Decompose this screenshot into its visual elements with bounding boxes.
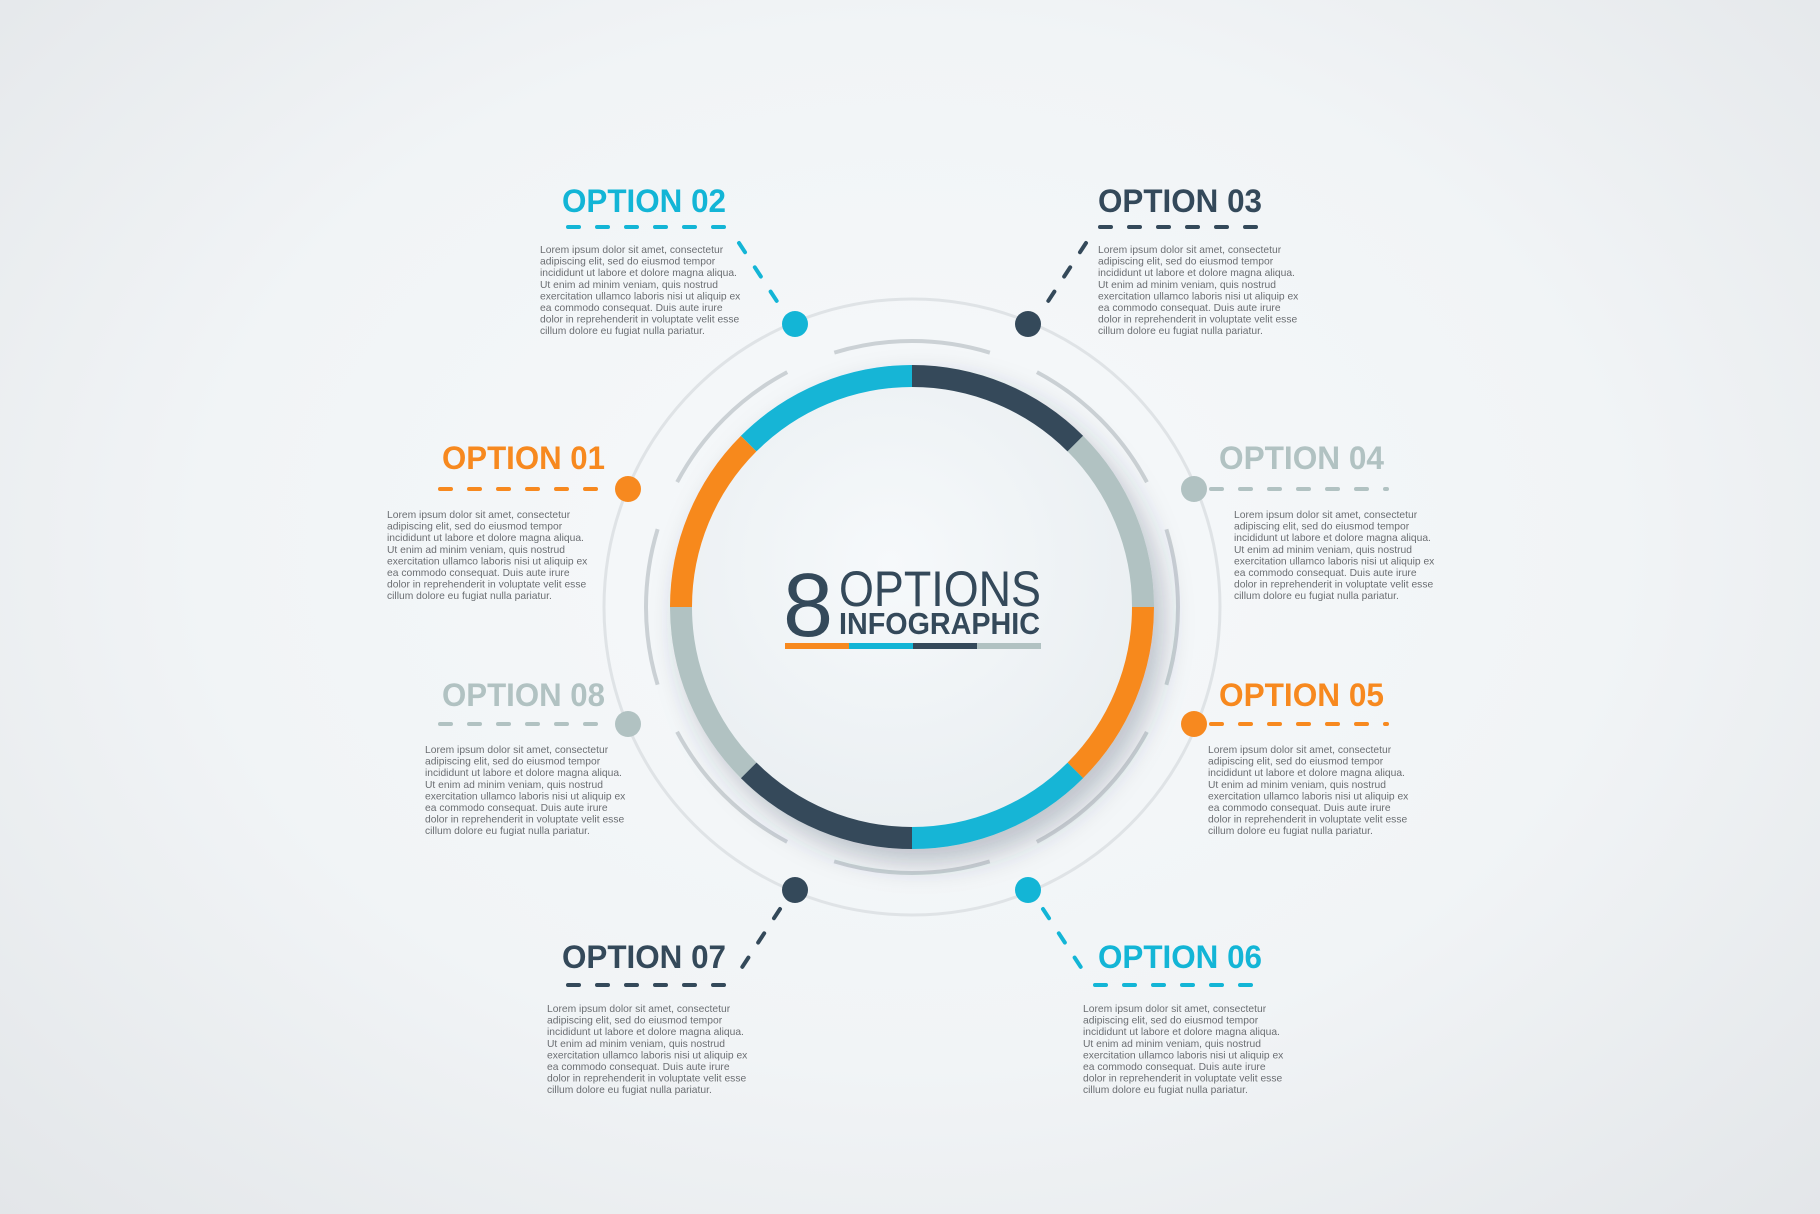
- option 08: adipiscing elit, sed do eiusmod tempor: [425, 757, 601, 768]
- option 06: dolor in reprehenderit in voluptate velit esse: [1083, 1074, 1282, 1085]
- option 08: cillum dolore eu fugiat nulla pariatur.: [425, 826, 590, 837]
- option 06: adipiscing elit, sed do eiusmod tempor: [1083, 1016, 1259, 1027]
- option 05: adipiscing elit, sed do eiusmod tempor: [1208, 757, 1384, 768]
- option 05: Ut enim ad minim veniam, quis nostrud: [1208, 780, 1386, 791]
- option 04: OPTION 04: [1219, 440, 1384, 476]
- option 08: OPTION 08: [442, 677, 605, 713]
- option 05: ea commodo consequat. Duis aute irure: [1208, 803, 1391, 814]
- option 02: Ut enim ad minim veniam, quis nostrud: [540, 280, 718, 291]
- option 07: [547, 877, 808, 1096]
- center title: INFOGRAPHIC: [839, 606, 1040, 641]
- option 01: exercitation ullamco laboris nisi ut aliquip ex: [387, 556, 588, 567]
- option 03: exercitation ullamco laboris nisi ut aliquip ex: [1098, 291, 1299, 302]
- option 07: ea commodo consequat. Duis aute irure: [547, 1062, 730, 1073]
- option 03: incididunt ut labore et dolore magna aliqua.: [1098, 268, 1295, 279]
- outer thin circle: [604, 299, 1220, 915]
- option 04: [1181, 440, 1435, 602]
- option 02: OPTION 02: [562, 183, 726, 219]
- option 08: ea commodo consequat. Duis aute irure: [425, 803, 608, 814]
- option 03: [1015, 183, 1299, 337]
- option 08: exercitation ullamco laboris nisi ut aliquip ex: [425, 791, 626, 802]
- option 02: ea commodo consequat. Duis aute irure: [540, 303, 723, 314]
- option 02: exercitation ullamco laboris nisi ut aliquip ex: [540, 291, 741, 302]
- option 07: cillum dolore eu fugiat nulla pariatur.: [547, 1085, 712, 1096]
- option 01: Lorem ipsum dolor sit amet, consectetur: [387, 510, 571, 521]
- option 07: OPTION 07: [562, 939, 726, 975]
- option 01: incididunt ut labore et dolore magna aliqua.: [387, 533, 584, 544]
- option 01: OPTION 01: [442, 440, 605, 476]
- central ring with disc: [585, 280, 1239, 934]
- option 02: incididunt ut labore et dolore magna aliqua.: [540, 268, 737, 279]
- option 06: Lorem ipsum dolor sit amet, consectetur: [1083, 1004, 1267, 1015]
- option 04: dolor in reprehenderit in voluptate velit esse: [1234, 580, 1433, 591]
- option 08: dolor in reprehenderit in voluptate velit esse: [425, 815, 624, 826]
- option 08: Ut enim ad minim veniam, quis nostrud: [425, 780, 603, 791]
- option 05: incididunt ut labore et dolore magna aliqua.: [1208, 768, 1405, 779]
- option 05: cillum dolore eu fugiat nulla pariatur.: [1208, 826, 1373, 837]
- option 05: Lorem ipsum dolor sit amet, consectetur: [1208, 745, 1392, 756]
- option 03: OPTION 03: [1098, 183, 1262, 219]
- option 04: Ut enim ad minim veniam, quis nostrud: [1234, 545, 1412, 556]
- option 02: Lorem ipsum dolor sit amet, consectetur: [540, 245, 724, 256]
- option 03: cillum dolore eu fugiat nulla pariatur.: [1098, 326, 1263, 337]
- center title: OPTIONS: [839, 561, 1041, 617]
- option 07: Lorem ipsum dolor sit amet, consectetur: [547, 1004, 731, 1015]
- option 01: adipiscing elit, sed do eiusmod tempor: [387, 522, 563, 533]
- center title: 8: [783, 556, 833, 656]
- option 06: cillum dolore eu fugiat nulla pariatur.: [1083, 1085, 1248, 1096]
- option 02: adipiscing elit, sed do eiusmod tempor: [540, 257, 716, 268]
- option 05: [1181, 677, 1409, 837]
- option 02: [540, 183, 808, 337]
- center title: [783, 556, 1041, 656]
- option 06: [1015, 877, 1284, 1096]
- option 07: incididunt ut labore et dolore magna aliqua.: [547, 1027, 744, 1038]
- option 04: incididunt ut labore et dolore magna aliqua.: [1234, 533, 1431, 544]
- option 08: Lorem ipsum dolor sit amet, consectetur: [425, 745, 609, 756]
- option 05: exercitation ullamco laboris nisi ut aliquip ex: [1208, 791, 1409, 802]
- option 03: Lorem ipsum dolor sit amet, consectetur: [1098, 245, 1282, 256]
- option 07: Ut enim ad minim veniam, quis nostrud: [547, 1039, 725, 1050]
- option 06: exercitation ullamco laboris nisi ut aliquip ex: [1083, 1050, 1284, 1061]
- option 08: incididunt ut labore et dolore magna aliqua.: [425, 768, 622, 779]
- option 04: adipiscing elit, sed do eiusmod tempor: [1234, 522, 1410, 533]
- option 05: dolor in reprehenderit in voluptate velit esse: [1208, 815, 1407, 826]
- option 03: dolor in reprehenderit in voluptate velit esse: [1098, 315, 1297, 326]
- option 06: Ut enim ad minim veniam, quis nostrud: [1083, 1039, 1261, 1050]
- option 02: cillum dolore eu fugiat nulla pariatur.: [540, 326, 705, 337]
- option 01: cillum dolore eu fugiat nulla pariatur.: [387, 591, 552, 602]
- option 02: dolor in reprehenderit in voluptate velit esse: [540, 315, 739, 326]
- option 05: OPTION 05: [1219, 677, 1384, 713]
- option 06: incididunt ut labore et dolore magna aliqua.: [1083, 1027, 1280, 1038]
- option 03: Ut enim ad minim veniam, quis nostrud: [1098, 280, 1276, 291]
- option 04: exercitation ullamco laboris nisi ut aliquip ex: [1234, 556, 1435, 567]
- option 04: ea commodo consequat. Duis aute irure: [1234, 568, 1417, 579]
- option 04: Lorem ipsum dolor sit amet, consectetur: [1234, 510, 1418, 521]
- option 08: [425, 677, 641, 837]
- option 01: Ut enim ad minim veniam, quis nostrud: [387, 545, 565, 556]
- option 04: cillum dolore eu fugiat nulla pariatur.: [1234, 591, 1399, 602]
- option 01: dolor in reprehenderit in voluptate velit esse: [387, 580, 586, 591]
- option 06: ea commodo consequat. Duis aute irure: [1083, 1062, 1266, 1073]
- option 01: ea commodo consequat. Duis aute irure: [387, 568, 570, 579]
- option 01: [387, 440, 641, 602]
- intermediate gray arcs: [646, 341, 1178, 873]
- option 07: dolor in reprehenderit in voluptate velit esse: [547, 1074, 746, 1085]
- option 03: adipiscing elit, sed do eiusmod tempor: [1098, 257, 1274, 268]
- option 06: OPTION 06: [1098, 939, 1262, 975]
- option 07: exercitation ullamco laboris nisi ut aliquip ex: [547, 1050, 748, 1061]
- option 07: adipiscing elit, sed do eiusmod tempor: [547, 1016, 723, 1027]
- option 03: ea commodo consequat. Duis aute irure: [1098, 303, 1281, 314]
